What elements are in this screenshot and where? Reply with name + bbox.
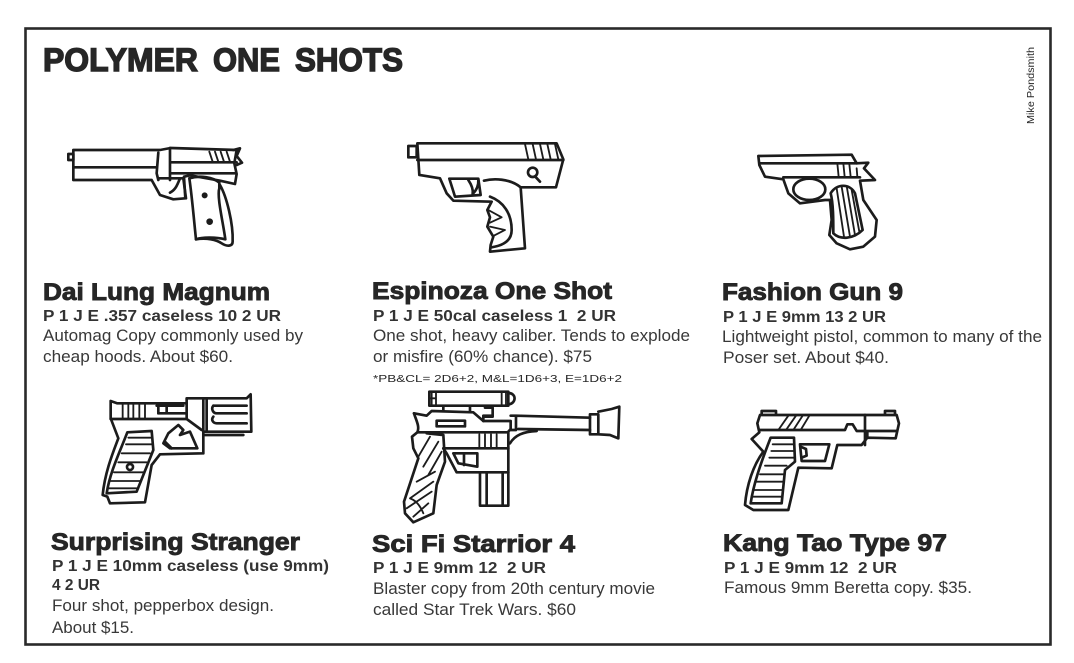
panel: Sci Fi Starrior 4 bbox=[372, 392, 655, 619]
description: Blaster copy from 20th century movie bbox=[373, 579, 655, 598]
title: POLYMER bbox=[43, 42, 198, 78]
icon: Surprising Stranger pistol bbox=[103, 394, 251, 503]
panel: Surprising Stranger bbox=[51, 394, 329, 637]
description bbox=[52, 596, 274, 637]
description: Famous 9mm Beretta copy. $35. bbox=[724, 578, 972, 597]
stats: P 1 J E 10mm caseless (use 9mm) bbox=[52, 558, 329, 575]
name: Surprising Stranger bbox=[51, 529, 300, 556]
name: Espinoza One Shot bbox=[372, 278, 612, 305]
panel: Kang Tao Type 97 bbox=[723, 411, 972, 597]
description: cheap hoods. About $60. bbox=[43, 347, 233, 366]
name: Sci Fi Starrior 4 bbox=[372, 531, 576, 558]
icon: Fashion Gun pistol bbox=[758, 155, 877, 249]
name: Kang Tao Type 97 bbox=[723, 530, 947, 557]
description: or misfire (60% chance). $75 bbox=[373, 347, 592, 366]
stats: P 1 J E 9mm 12 2 UR bbox=[724, 560, 897, 577]
description bbox=[373, 326, 690, 366]
description: One shot, heavy caliber. Tends to explode bbox=[373, 326, 690, 345]
stats bbox=[52, 558, 329, 594]
stats: P 1 J E .357 caseless 10 2 UR bbox=[43, 308, 281, 325]
footnote: *PB&CL= 2D6+2, M&L=1D6+3, E=1D6+2 bbox=[373, 373, 622, 385]
description: Four shot, pepperbox design. bbox=[52, 596, 274, 615]
panel: Fashion Gun 9 bbox=[722, 155, 1042, 367]
title: SHOTS bbox=[295, 42, 403, 78]
icon: Sci Fi Starrior blaster bbox=[404, 392, 619, 522]
title: ONE bbox=[213, 42, 280, 78]
title bbox=[43, 42, 403, 78]
description: Lightweight pistol, common to many of the bbox=[722, 327, 1042, 346]
icon: Dai Lung Magnum pistol bbox=[68, 148, 242, 246]
name: Fashion Gun 9 bbox=[722, 279, 903, 306]
description: About $15. bbox=[52, 618, 134, 637]
description: Automag Copy commonly used by bbox=[43, 326, 303, 345]
icon: Kang Tao pistol bbox=[745, 411, 899, 510]
stats: P 1 J E 9mm 12 2 UR bbox=[373, 560, 546, 577]
stats: 4 2 UR bbox=[52, 577, 100, 594]
panel: Dai Lung Magnum bbox=[43, 148, 303, 366]
description bbox=[43, 326, 303, 366]
credit: Mike Pondsmith: Mike Pondsmith bbox=[1026, 47, 1037, 124]
stats: P 1 J E 50cal caseless 1 2 UR bbox=[373, 308, 616, 325]
stats: P 1 J E 9mm 13 2 UR bbox=[723, 309, 886, 326]
icon: Espinoza pistol bbox=[408, 143, 563, 252]
description bbox=[373, 579, 655, 619]
description: called Star Trek Wars. $60 bbox=[373, 600, 576, 619]
panel: Espinoza One Shot bbox=[372, 143, 690, 385]
name: Dai Lung Magnum bbox=[43, 279, 270, 306]
description: Poser set. About $40. bbox=[723, 348, 889, 367]
description bbox=[722, 327, 1042, 367]
